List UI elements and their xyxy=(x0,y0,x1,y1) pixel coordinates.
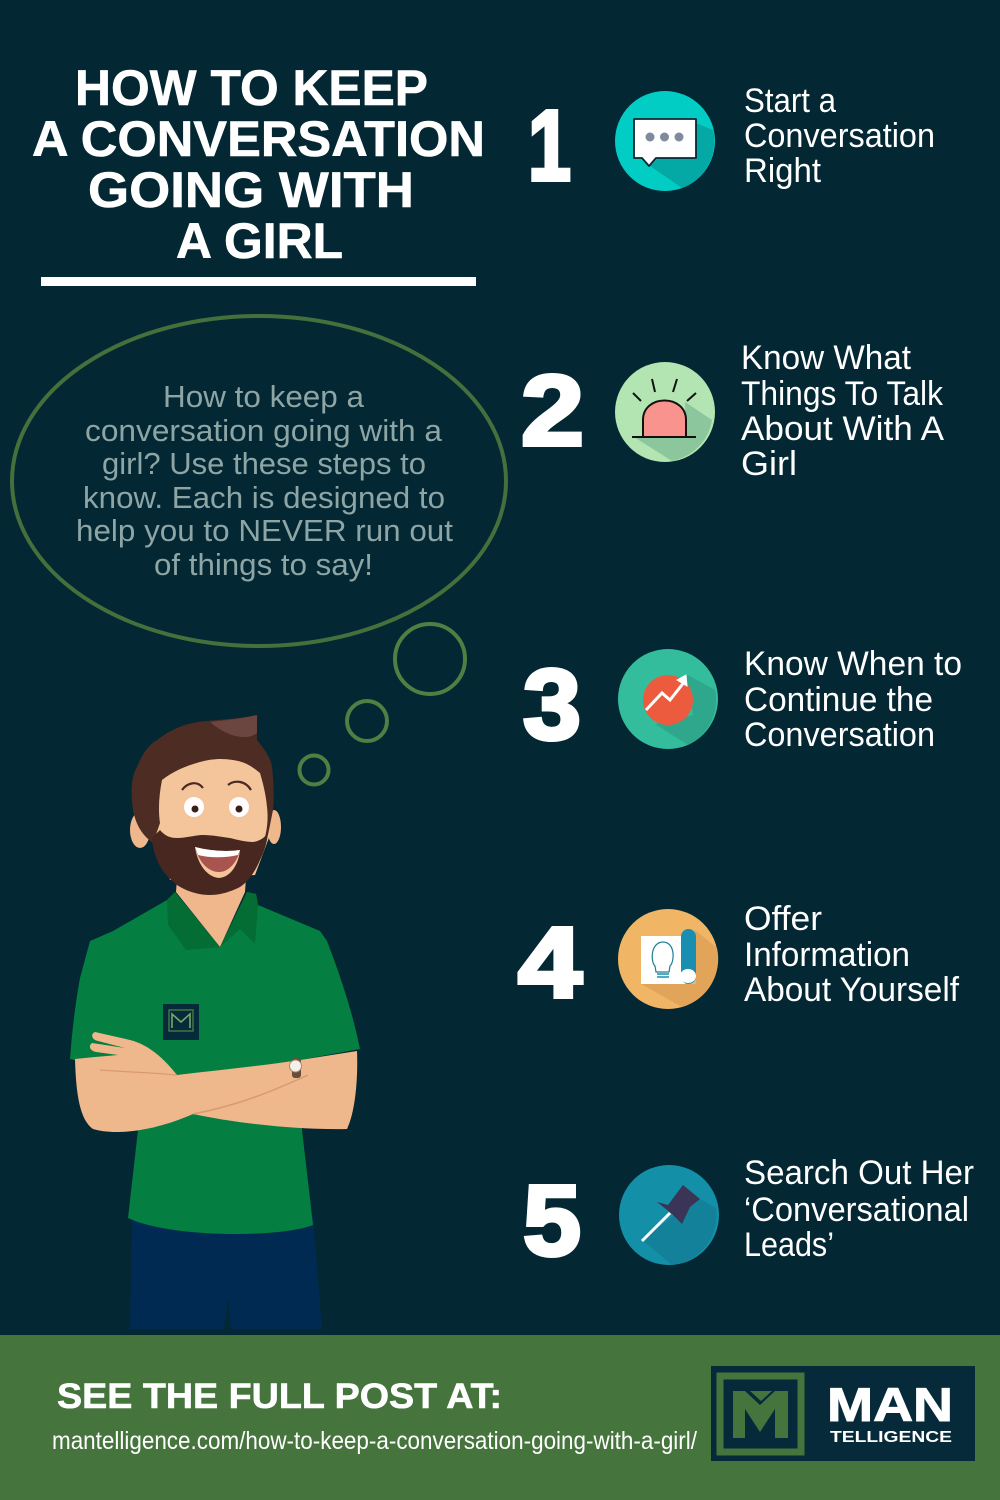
logo: MAN xyxy=(827,1378,953,1431)
label: ‘Conversational xyxy=(744,1191,969,1229)
title: A CONVERSATION xyxy=(32,111,485,167)
shirt badge xyxy=(163,1004,199,1040)
label: Conversation xyxy=(744,117,935,155)
number 3: 3 xyxy=(523,649,581,761)
icon: growth chart xyxy=(618,649,718,749)
label: Know When to xyxy=(744,645,962,683)
title: GOING WITH xyxy=(88,162,414,218)
hair tuft highlight xyxy=(210,715,257,737)
hair xyxy=(132,715,274,843)
icon: chat bubble xyxy=(615,91,715,191)
neck xyxy=(176,878,246,947)
title underline xyxy=(41,277,476,286)
label: Things To Talk xyxy=(741,375,944,413)
logo: TELLIGENCE xyxy=(830,1429,952,1446)
icon: alarm light xyxy=(615,362,715,462)
thought bubble xyxy=(12,316,506,646)
crossed arms xyxy=(75,1032,357,1132)
intro text xyxy=(76,379,453,582)
intro text: help you to NEVER run out xyxy=(76,513,453,548)
label: About With A xyxy=(741,410,944,448)
eyes xyxy=(182,782,251,817)
label xyxy=(744,645,962,754)
character: man with crossed arms xyxy=(70,715,360,1329)
ears xyxy=(130,812,150,848)
mouth xyxy=(195,847,240,878)
icon: lightbulb blueprint xyxy=(618,909,718,1009)
label: Conversation xyxy=(744,716,935,754)
intro text: of things to say! xyxy=(154,547,373,582)
title xyxy=(32,60,485,269)
footer heading: SEE THE FULL POST AT: xyxy=(57,1377,502,1416)
label: Leads’ xyxy=(744,1226,834,1264)
icon: push pin xyxy=(619,1165,719,1265)
title: HOW TO KEEP xyxy=(75,60,428,116)
label: Know What xyxy=(741,339,912,377)
label xyxy=(741,339,944,483)
beard xyxy=(152,830,268,895)
collar xyxy=(167,892,258,950)
face xyxy=(155,759,270,880)
label: Information xyxy=(744,936,910,974)
step 3 xyxy=(523,645,962,761)
number 1: 1 xyxy=(528,90,571,202)
footer url: mantelligence.com/how-to-keep-a-conversation-going-with-a-girl/ xyxy=(52,1427,697,1455)
intro text: How to keep a xyxy=(163,379,365,414)
step 2 xyxy=(521,339,944,483)
label: Continue the xyxy=(744,681,933,719)
number 4: 4 xyxy=(518,907,582,1019)
logo xyxy=(711,1366,975,1461)
trousers xyxy=(130,1215,322,1329)
number 2: 2 xyxy=(521,355,584,467)
intro text: conversation going with a xyxy=(85,413,443,448)
intro text: know. Each is designed to xyxy=(83,480,445,515)
label: Right xyxy=(744,152,822,190)
step 5 xyxy=(523,1154,974,1277)
label xyxy=(744,900,960,1009)
title: A GIRL xyxy=(176,213,343,269)
step 4 xyxy=(518,900,960,1019)
number 5: 5 xyxy=(523,1165,581,1277)
footer band xyxy=(0,1335,1000,1500)
label xyxy=(744,82,935,190)
watch xyxy=(290,1058,302,1078)
label: Offer xyxy=(744,900,822,938)
thought circles xyxy=(300,624,465,784)
label: Start a xyxy=(744,82,836,120)
label xyxy=(744,1154,974,1264)
intro text: girl? Use these steps to xyxy=(102,446,426,481)
label: About Yourself xyxy=(744,971,960,1009)
label: Search Out Her xyxy=(744,1154,974,1192)
label: Girl xyxy=(741,445,797,483)
step 1 xyxy=(528,82,935,202)
shirt xyxy=(70,892,360,1234)
